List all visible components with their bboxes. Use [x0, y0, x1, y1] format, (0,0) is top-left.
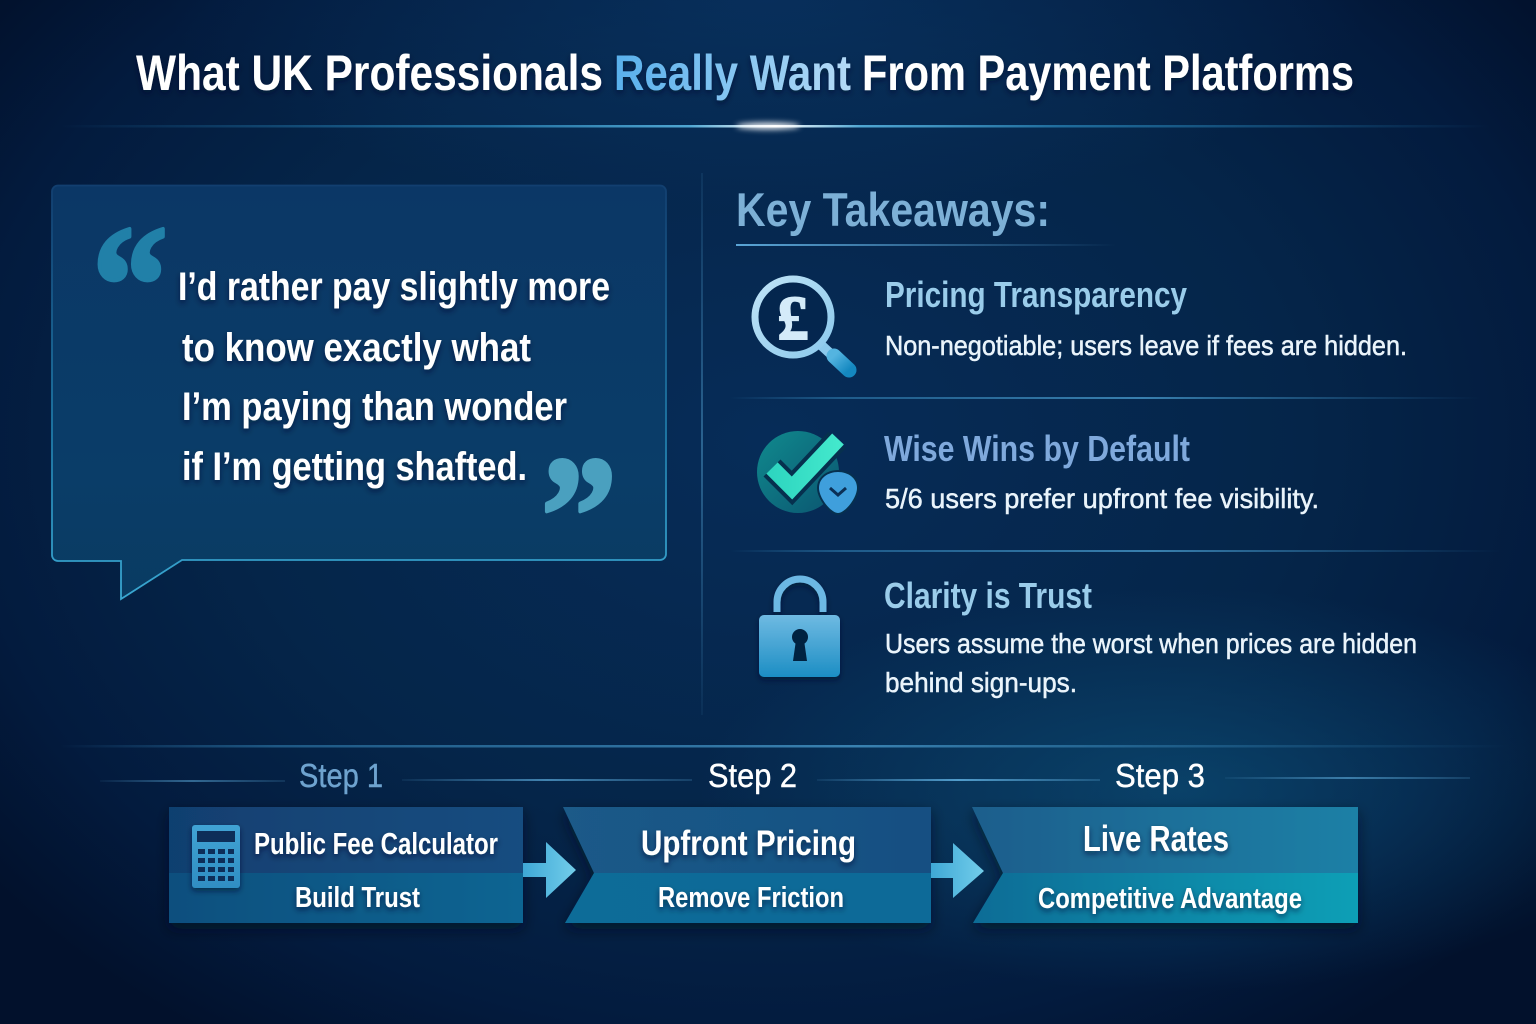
step 3 text	[1038, 818, 1302, 915]
step 2 text: Remove Friction	[658, 882, 844, 914]
icon: magnifier with pound: £	[778, 285, 808, 353]
arrow: step 2 to step 3	[931, 843, 984, 898]
icon: magnifier with pound	[755, 279, 849, 370]
takeaway body	[885, 628, 1417, 698]
takeaway body: behind sign-ups.	[885, 667, 1077, 698]
step 1 text: Build Trust	[295, 882, 420, 914]
step 2 box: upfront pricing	[563, 807, 931, 923]
step 3 box: live rates	[972, 807, 1358, 923]
quote text: I’d rather pay slightly more	[178, 265, 610, 309]
takeaway body: Non-negotiable; users leave if fees are hidden.	[885, 330, 1407, 361]
quote text: if I’m getting shafted.	[182, 445, 527, 489]
title	[136, 45, 1354, 101]
step 1 text: Public Fee Calculator	[254, 826, 498, 861]
title: Really Want	[614, 45, 851, 101]
icon: opening quote mark: “	[92, 191, 168, 379]
takeaway heading: Clarity is Trust	[884, 575, 1092, 616]
title: What UK Professionals	[136, 45, 603, 101]
heading: key takeaways: Key Takeaways:	[736, 183, 1050, 236]
step 2 text: Upfront Pricing	[641, 824, 856, 863]
takeaway: wise wins by default	[757, 428, 1319, 515]
icon: closing quote mark: ”	[541, 422, 617, 610]
takeaway: clarity is trust	[759, 575, 1417, 698]
step 2 text	[641, 824, 856, 914]
takeaway body: Users assume the worst when prices are hidden	[885, 628, 1417, 659]
step 1 box: public fee calculator	[169, 807, 523, 923]
quote text: I’m paying than wonder	[182, 385, 567, 429]
step 3 text: Competitive Advantage	[1038, 883, 1302, 915]
takeaway heading: Pricing Transparency	[885, 274, 1187, 315]
icon: calculator	[192, 825, 240, 888]
title: From Payment Platforms	[862, 45, 1354, 101]
panel: quote speech bubble	[52, 186, 666, 610]
quote text	[178, 265, 610, 489]
icon: padlock	[759, 579, 840, 677]
takeaway body: 5/6 users prefer upfront fee visibility.	[885, 483, 1319, 514]
takeaway heading: Wise Wins by Default	[884, 428, 1190, 469]
quote text: to know exactly what	[182, 326, 531, 370]
step labels	[100, 757, 1470, 794]
takeaway: pricing transparency	[755, 274, 1407, 370]
step labels: Step 3	[1115, 757, 1205, 794]
step 1 text	[254, 826, 498, 914]
step labels: Step 1	[299, 757, 383, 794]
icon: check with shield	[757, 431, 859, 515]
arrow: step 1 to step 2	[523, 842, 576, 898]
step labels: Step 2	[708, 757, 797, 794]
step 3 text: Live Rates	[1083, 818, 1229, 859]
